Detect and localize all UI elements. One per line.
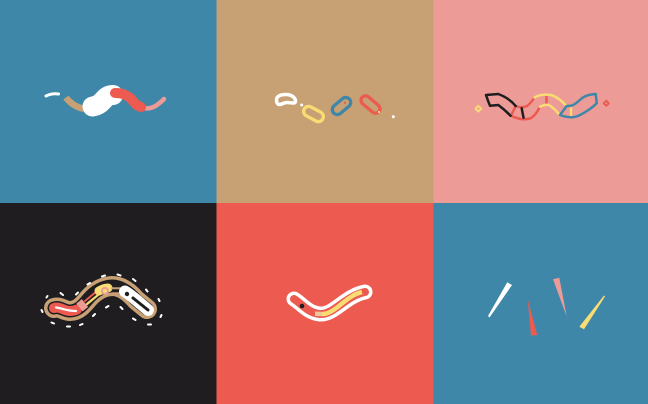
panel: red smile worm: [216, 203, 434, 404]
black divider: [522, 108, 524, 118]
red shard: [528, 299, 537, 336]
dashed outline: [42, 274, 162, 326]
red diamond: [604, 101, 609, 106]
black section: [486, 94, 516, 116]
blue ring: [330, 95, 353, 117]
black slot in white section: [133, 298, 148, 310]
red thin connector: [85, 291, 97, 301]
white section: [125, 292, 148, 310]
top tan bars: [112, 288, 120, 293]
yellow stripe: [322, 292, 362, 314]
yellow diamond: [475, 106, 481, 112]
yellow divider: [570, 108, 572, 117]
white inner line: [56, 308, 76, 311]
yellow dot: [378, 111, 380, 113]
blue section: [560, 94, 597, 117]
red section: [511, 98, 540, 119]
black dot: [300, 304, 304, 308]
yellow shard: [579, 296, 605, 329]
white ring: [276, 94, 296, 105]
yellow connector: [87, 295, 98, 304]
yellow ring: [302, 105, 325, 123]
pink ring: [102, 288, 108, 294]
white arc fragment: [46, 94, 58, 96]
pink section: [80, 303, 85, 308]
panel: pink outlined worm: [434, 0, 648, 203]
red divider: [545, 95, 548, 104]
white dot: [300, 104, 303, 106]
white outline body: [294, 292, 365, 314]
black dot: [125, 292, 129, 296]
red section: [54, 308, 77, 311]
pink shard: [553, 278, 567, 316]
yellow section: [534, 95, 567, 115]
far white dot: [392, 115, 395, 118]
tan outer body: [54, 286, 147, 311]
small red dot: [344, 102, 346, 104]
yellow section: [99, 288, 108, 291]
black inner body: [54, 286, 147, 311]
red ring: [359, 94, 382, 115]
white thick segment: [92, 95, 113, 106]
panel: blue shards: [434, 203, 648, 404]
panel: blue segmented worm: [0, 0, 216, 203]
pale stripe end: [315, 312, 322, 316]
coral inner body: [294, 292, 365, 314]
pink tail segment: [140, 99, 164, 108]
tan segment: [66, 98, 84, 109]
panel: black layered worm: [0, 203, 216, 404]
red segment: [115, 93, 141, 107]
panel: tan separated rings: [216, 0, 434, 203]
white shard: [488, 282, 512, 318]
